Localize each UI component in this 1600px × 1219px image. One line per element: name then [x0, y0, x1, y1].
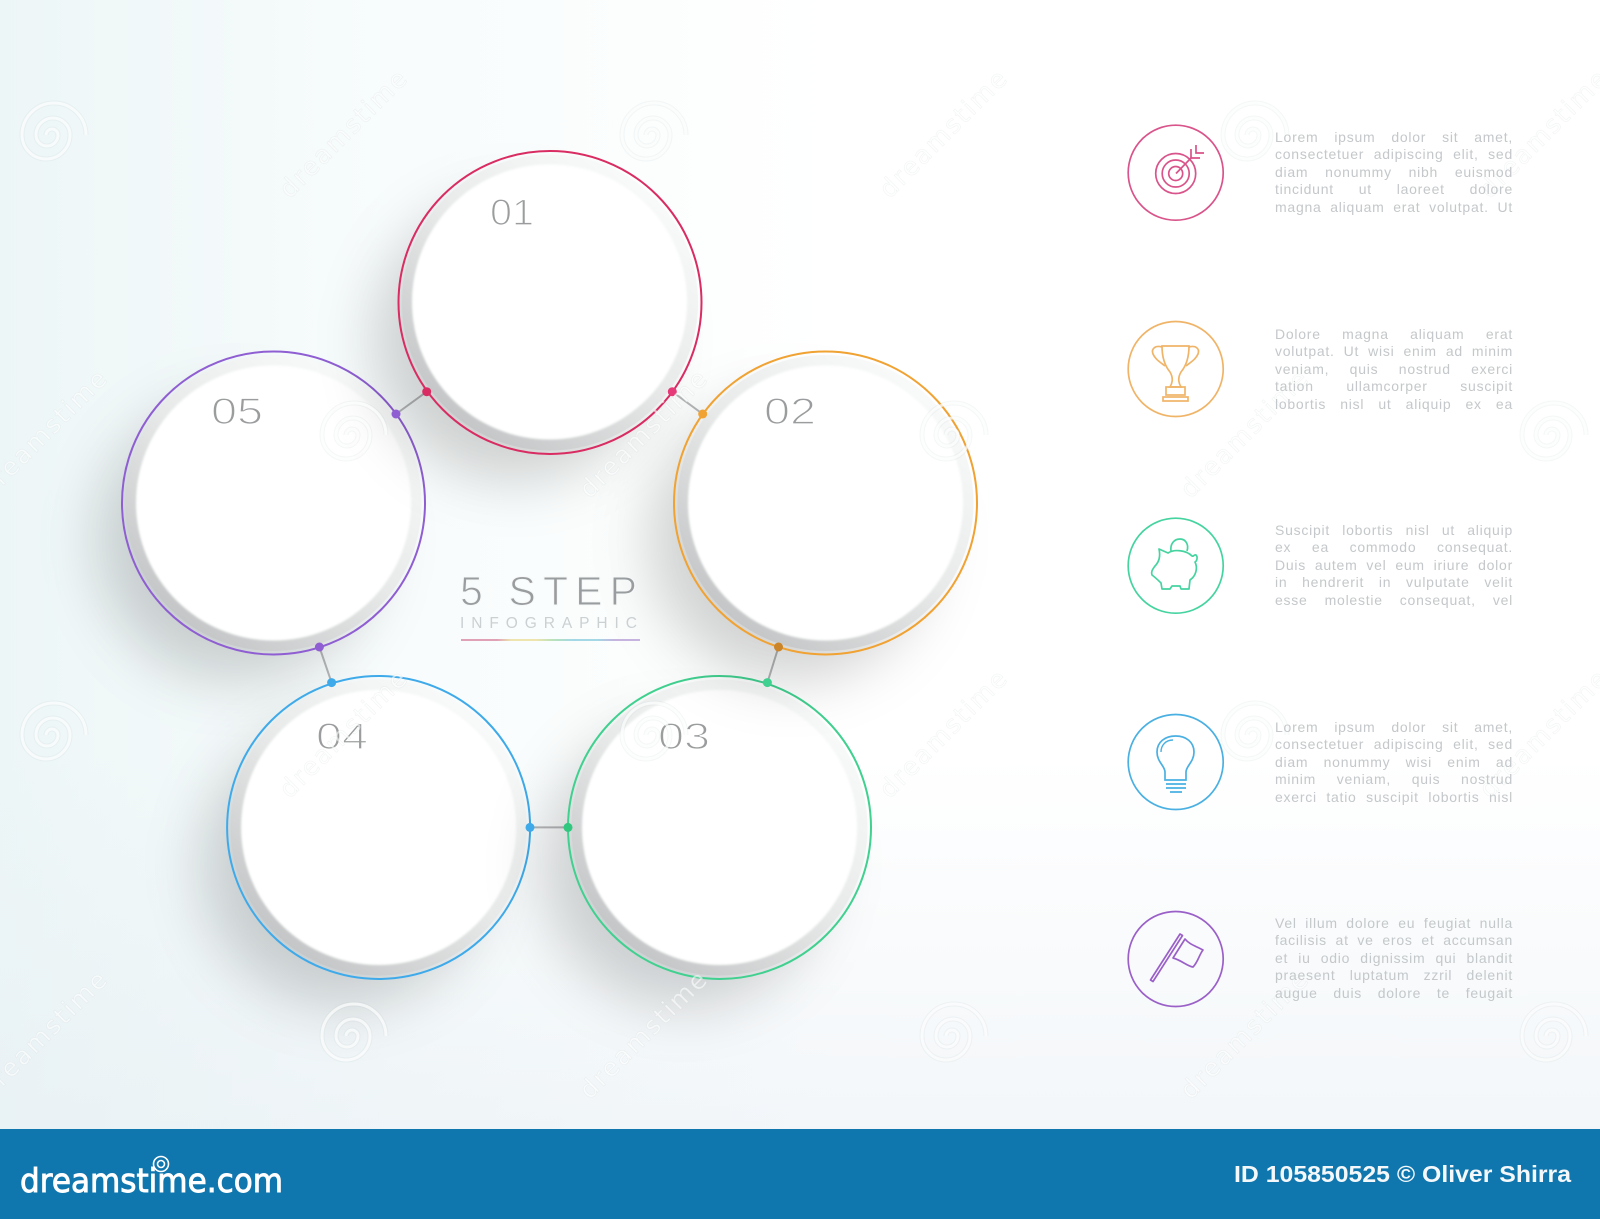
watermark: dreamstime — [873, 664, 1013, 804]
center title: INFOGRAPHIC — [460, 615, 637, 632]
text block 5 — [1275, 915, 1513, 1001]
center title — [460, 568, 640, 641]
text block 4 — [1275, 719, 1513, 805]
text block 1: magna aliquam erat volutpat. Ut — [1275, 199, 1513, 215]
text block 3: esse molestie consequat, vel — [1275, 592, 1513, 608]
text block 4: minim veniam, quis nostrud — [1275, 771, 1513, 787]
text block 1 — [1275, 129, 1513, 215]
circle 05: 05 — [211, 391, 263, 432]
watermark: dreamstime — [573, 965, 713, 1105]
text block 1: tincidunt ut laoreet dolore — [1275, 181, 1513, 197]
watermark: dreamstime — [873, 64, 1013, 204]
footer bar — [0, 1129, 1600, 1219]
text block 3: ex ea commodo consequat. — [1275, 539, 1513, 555]
center title: 5 STEP — [460, 568, 637, 614]
text block 3 — [1275, 522, 1513, 608]
icon: trophy — [1128, 322, 1223, 416]
watermark: dreamstime — [1174, 364, 1314, 504]
text block 4: Lorem ipsum dolor sit amet, — [1275, 719, 1513, 735]
circle 03 — [542, 676, 871, 1007]
circle 02: 02 — [764, 391, 816, 432]
text block 3: in hendrerit in vulputate velit — [1275, 574, 1513, 590]
watermark: dreamstime — [1174, 965, 1314, 1105]
watermark: dreamstime — [273, 664, 413, 804]
text block 4: exerci tatio suscipit lobortis nisl — [1275, 789, 1513, 805]
text block 2 — [1275, 326, 1513, 412]
text block 2: veniam, quis nostrud exerci — [1275, 361, 1513, 377]
footer bar: ID 105850525 © Oliver Shirra — [1234, 1161, 1571, 1187]
footer bar: dreamstime.com — [20, 1161, 283, 1200]
icon: target — [1128, 125, 1223, 220]
text block 5: Vel illum dolore eu feugiat nulla — [1275, 915, 1513, 931]
circle 05 — [96, 352, 425, 682]
connector lines between circles — [319, 392, 778, 827]
icon: light bulb — [1128, 714, 1223, 810]
text block 2: Dolore magna aliquam erat — [1275, 326, 1513, 342]
icon: piggy bank — [1128, 518, 1223, 613]
connector dots — [315, 387, 783, 832]
circle 04 — [201, 676, 530, 1007]
text block 5: facilisis at ve eros et accumsan — [1275, 932, 1513, 948]
circle 02 — [648, 352, 977, 682]
circle 03: 03 — [658, 716, 710, 757]
text block 2: lobortis nisl ut aliquip ex ea — [1275, 396, 1513, 412]
watermark: dreamstime — [573, 364, 713, 504]
text block 3: Duis autem vel eum iriure dolor — [1275, 557, 1513, 573]
text block 2: volutpat. Ut wisi enim ad minim — [1275, 343, 1513, 359]
text block 4: consectetuer adipiscing elit, sed — [1275, 736, 1513, 752]
watermark: dreamstime — [273, 64, 413, 204]
text block 1: consectetuer adipiscing elit, sed — [1275, 146, 1513, 162]
text block 1: Lorem ipsum dolor sit amet, — [1275, 129, 1513, 145]
icon: flag — [1128, 912, 1223, 1006]
text block 4: diam nonummy wisi enim ad — [1275, 754, 1513, 770]
circle 01: 01 — [490, 192, 534, 233]
text block 3: Suscipit lobortis nisl ut aliquip — [1275, 522, 1513, 538]
text block 5: augue duis dolore te feugait — [1275, 985, 1513, 1001]
circle 04: 04 — [316, 716, 368, 757]
circle 01 — [373, 151, 702, 482]
text block 2: tation ullamcorper suscipit — [1275, 378, 1513, 394]
text block 5: praesent luptatum zzril delenit — [1275, 967, 1513, 983]
text block 5: et iu odio dignissim qui blandit — [1275, 950, 1513, 966]
text block 1: diam nonummy nibh euismod — [1275, 164, 1513, 180]
